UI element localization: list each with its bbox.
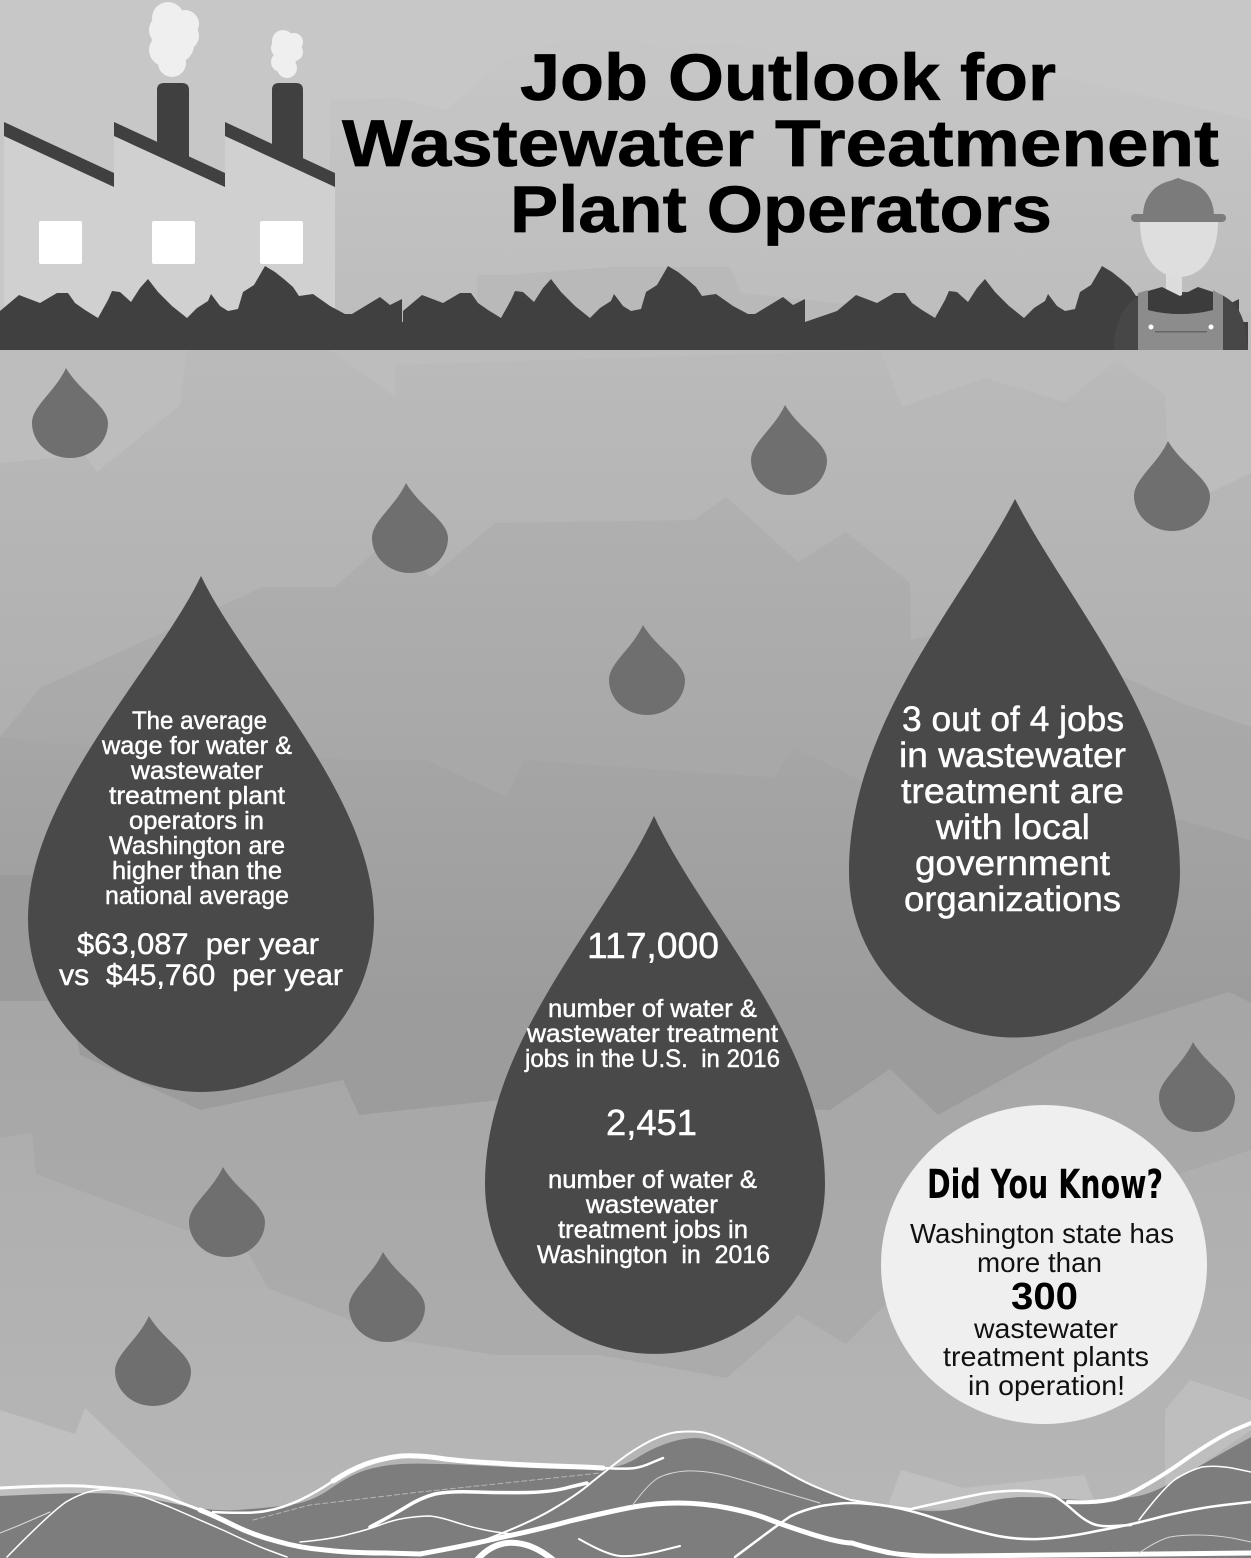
callout: did you know: wastewater <box>973 1313 1118 1344</box>
title: Plant Operators <box>510 172 1052 246</box>
callout: did you know: treatment plants <box>943 1341 1149 1372</box>
callout: did you know: 300 <box>1011 1276 1078 1318</box>
drop: job counts: Washington in 2016 <box>537 1241 770 1269</box>
overall pocket seam <box>1155 331 1207 332</box>
drop: local government jobs: treatment are <box>901 772 1124 811</box>
drop: wage comparison: national average <box>105 882 289 910</box>
hard hat <box>1131 178 1226 222</box>
drop: wage comparison: wastewater <box>130 757 263 785</box>
drop: job counts: number of water & <box>548 995 757 1023</box>
drop: job counts: treatment jobs in <box>558 1216 748 1244</box>
drop: wage comparison: $63,087 per year <box>77 928 319 961</box>
drop: job counts: jobs in the U.S. in 2016 <box>524 1045 780 1073</box>
drop: local government jobs <box>849 499 1180 1038</box>
callout: did you know: in operation! <box>968 1370 1125 1401</box>
drop: wage comparison: higher than the <box>112 857 282 885</box>
background: header band <box>0 0 1251 350</box>
callout: did you know <box>881 1105 1207 1424</box>
drop: wage comparison <box>28 576 374 1092</box>
drop: wage comparison: Washington are <box>109 832 285 860</box>
callout: did you know: Did You Know? <box>927 1162 1163 1208</box>
drop: job counts: 2,451 <box>606 1102 697 1143</box>
drop: wage comparison: wage for water & <box>101 732 292 760</box>
drop: local government jobs: government <box>915 844 1110 883</box>
worker overalls <box>1138 290 1223 350</box>
drop: local government jobs: with local <box>935 808 1090 847</box>
callout: did you know: more than <box>977 1247 1102 1278</box>
smoke clouds <box>149 2 303 78</box>
factory windows <box>39 221 303 264</box>
drop: job counts: 117,000 <box>587 925 719 966</box>
factory building <box>4 136 335 330</box>
worker neck <box>1166 270 1182 298</box>
worker illustration <box>1114 178 1248 350</box>
small water drops <box>32 368 1235 1406</box>
drop: wage comparison: operators in <box>129 807 264 835</box>
drop: job counts <box>485 816 825 1354</box>
overall buttons <box>1148 324 1214 330</box>
drop: local government jobs: 3 out of 4 jobs <box>902 700 1124 739</box>
drop: local government jobs: in wastewater <box>899 736 1126 775</box>
drop: job counts: number of water & <box>548 1166 757 1194</box>
drop: local government jobs: organizations <box>904 880 1121 919</box>
smokestacks <box>157 83 303 165</box>
callout: did you know: Washington state has <box>910 1218 1174 1249</box>
title: Job Outlook for <box>520 40 1056 114</box>
background: body landscape <box>0 350 1251 1558</box>
wave highlights <box>0 1423 1251 1558</box>
drop: wage comparison: The average <box>132 707 267 735</box>
worker shirt <box>1148 287 1213 314</box>
drop: wage comparison: treatment plant <box>109 782 285 810</box>
drop: wage comparison: vs $45,760 per year <box>59 959 343 992</box>
worker shoulders <box>1114 292 1248 350</box>
drop: job counts: wastewater <box>585 1191 718 1219</box>
drop: job counts: wastewater treatment <box>526 1020 778 1048</box>
title: Wastewater Treatmenent <box>342 106 1219 180</box>
factory illustration <box>4 2 335 330</box>
skyline silhouette <box>0 266 1248 350</box>
factory roofs <box>4 122 335 187</box>
water waves <box>0 1423 1251 1558</box>
title <box>342 40 1219 246</box>
wave body <box>0 1437 1251 1558</box>
worker face <box>1140 222 1218 277</box>
